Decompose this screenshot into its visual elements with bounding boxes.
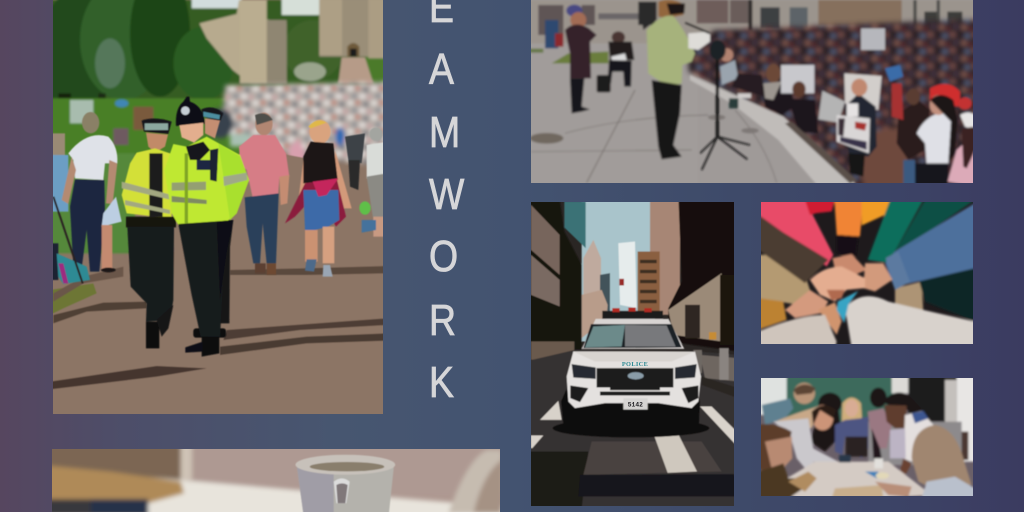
brown sleeve xyxy=(758,215,828,283)
blonde woman, centre xyxy=(842,398,862,428)
photo: white coffee cup on table, cropped xyxy=(52,449,500,512)
coffee cup xyxy=(295,455,395,512)
photo: police SUV front view on a city street xyxy=(531,202,734,506)
table surface xyxy=(41,465,507,512)
police lettering: POLICE xyxy=(622,361,648,368)
man with patterned shirt xyxy=(762,398,793,425)
dark buildings xyxy=(528,195,738,368)
background: trees and castle xyxy=(38,0,407,253)
cream sleeves xyxy=(758,315,837,348)
red sweater sleeve xyxy=(758,200,833,266)
dark haired woman behind xyxy=(818,393,842,414)
office backdrop xyxy=(758,375,975,465)
vertical title: TEAMWORK, cropped at top: W xyxy=(429,170,464,219)
blue sleeve xyxy=(885,203,975,290)
woman in black top xyxy=(285,120,352,277)
pavement lines and cables xyxy=(531,90,777,183)
man in plaid shirt xyxy=(870,388,887,408)
vertical title: TEAMWORK, cropped at top: A xyxy=(429,45,454,94)
green sleeves xyxy=(868,200,923,263)
man in pink shirt xyxy=(239,113,289,275)
vertical title: TEAMWORK, cropped at top: K xyxy=(429,358,454,407)
sky and towers xyxy=(582,195,680,342)
officer front, hi-vis jacket xyxy=(164,97,249,357)
stage edge xyxy=(690,75,855,187)
crowd mass xyxy=(688,18,992,200)
microphone stand xyxy=(685,23,750,170)
chair back xyxy=(448,450,502,512)
road and shadows xyxy=(50,147,387,417)
vertical title: TEAMWORK, cropped at top: R xyxy=(429,296,456,345)
right bystanders xyxy=(345,127,387,237)
curly haired woman, foreground right xyxy=(912,425,972,488)
officer behind xyxy=(193,107,233,338)
photo: speaker at a rally addressing protest crowd xyxy=(531,0,973,183)
vertical title: TEAMWORK, cropped at top: O xyxy=(429,232,458,281)
seated person xyxy=(597,31,634,92)
smiling woman in white xyxy=(775,405,822,428)
road surface xyxy=(525,348,738,512)
photo: colleagues working around a table xyxy=(761,378,973,496)
woman in dark coat xyxy=(565,5,597,113)
plaza xyxy=(531,43,698,187)
vertical title: TEAMWORK, cropped at top: M xyxy=(429,108,460,157)
yellow cuff xyxy=(758,298,787,330)
crowd in the distance xyxy=(207,82,387,172)
bystanders xyxy=(50,97,387,357)
hands xyxy=(832,254,867,275)
buildings behind the crowd xyxy=(525,0,992,43)
main speaker in green jacket xyxy=(638,0,710,159)
vertical title: TEAMWORK, cropped at top xyxy=(428,0,465,407)
tripod and bag xyxy=(57,253,90,284)
licence plate: 5142 xyxy=(628,402,643,408)
black woman with braids xyxy=(882,392,933,422)
photo: police officers walking among crowd xyxy=(53,0,383,414)
blue scrunchie xyxy=(837,291,858,323)
man in white shirt xyxy=(62,112,117,272)
orange sleeve xyxy=(834,200,863,236)
police SUV xyxy=(553,308,709,438)
man with glasses, foreground left xyxy=(758,424,792,472)
wall and door frame xyxy=(41,440,181,483)
photo: hands stacked together xyxy=(761,202,973,344)
foreground protesters xyxy=(720,28,975,187)
table with papers xyxy=(782,462,932,502)
officer left xyxy=(122,119,176,348)
